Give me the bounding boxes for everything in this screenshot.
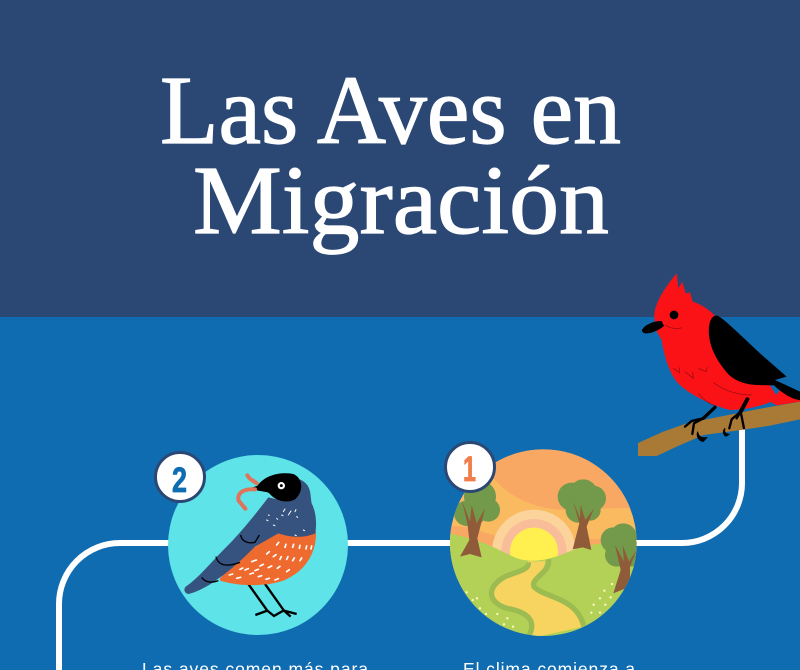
black head [257,473,301,501]
badge: number 1: 1 [463,450,476,489]
upper sky band [494,449,630,510]
title: Migración [193,147,609,255]
orange belly [220,532,316,585]
icon: red cardinal on branch [638,273,800,456]
blue back and tail [184,479,316,594]
lower sky band [447,526,637,570]
title: Las Aves en [160,57,621,165]
wing lines [202,535,259,582]
sun glow outer [492,510,576,552]
icon: robin with worm [184,473,316,617]
sky [447,447,640,580]
legs and claws [703,407,715,418]
sun [510,528,558,561]
eye [670,311,678,319]
panel: title header band [0,0,800,317]
icon: landscape with sunset [447,447,643,640]
tree center trunk [573,502,594,550]
tree left trunk [460,501,485,557]
badge: number 2: 2 [172,461,187,500]
step 2: birds eat more [142,452,368,670]
beak [252,483,269,493]
pupil [280,484,283,487]
tail [770,387,800,405]
eye [278,482,285,489]
hills [447,533,640,640]
tree center canopy [558,479,606,523]
path edges [491,559,584,635]
branch [638,402,800,456]
sun glow inner [502,519,566,556]
white belly flecks [229,542,312,580]
legs [247,583,297,617]
title [160,57,621,255]
beak [642,321,664,333]
wing [709,316,800,400]
feather marks [665,325,752,406]
panel: main blue background [0,317,800,670]
body [654,273,778,410]
migration route line [59,420,742,670]
flowers [465,583,613,628]
tree left canopy [454,481,500,526]
tree right trunk [613,545,637,593]
white back speckles [267,509,305,536]
badge: number 2 [156,452,204,502]
path [493,561,583,638]
tree right canopy [600,523,637,567]
badge: number 1 [446,442,494,492]
icon circle: robin background [168,455,348,635]
worm [238,475,257,509]
step 1: climate changes [446,442,643,670]
